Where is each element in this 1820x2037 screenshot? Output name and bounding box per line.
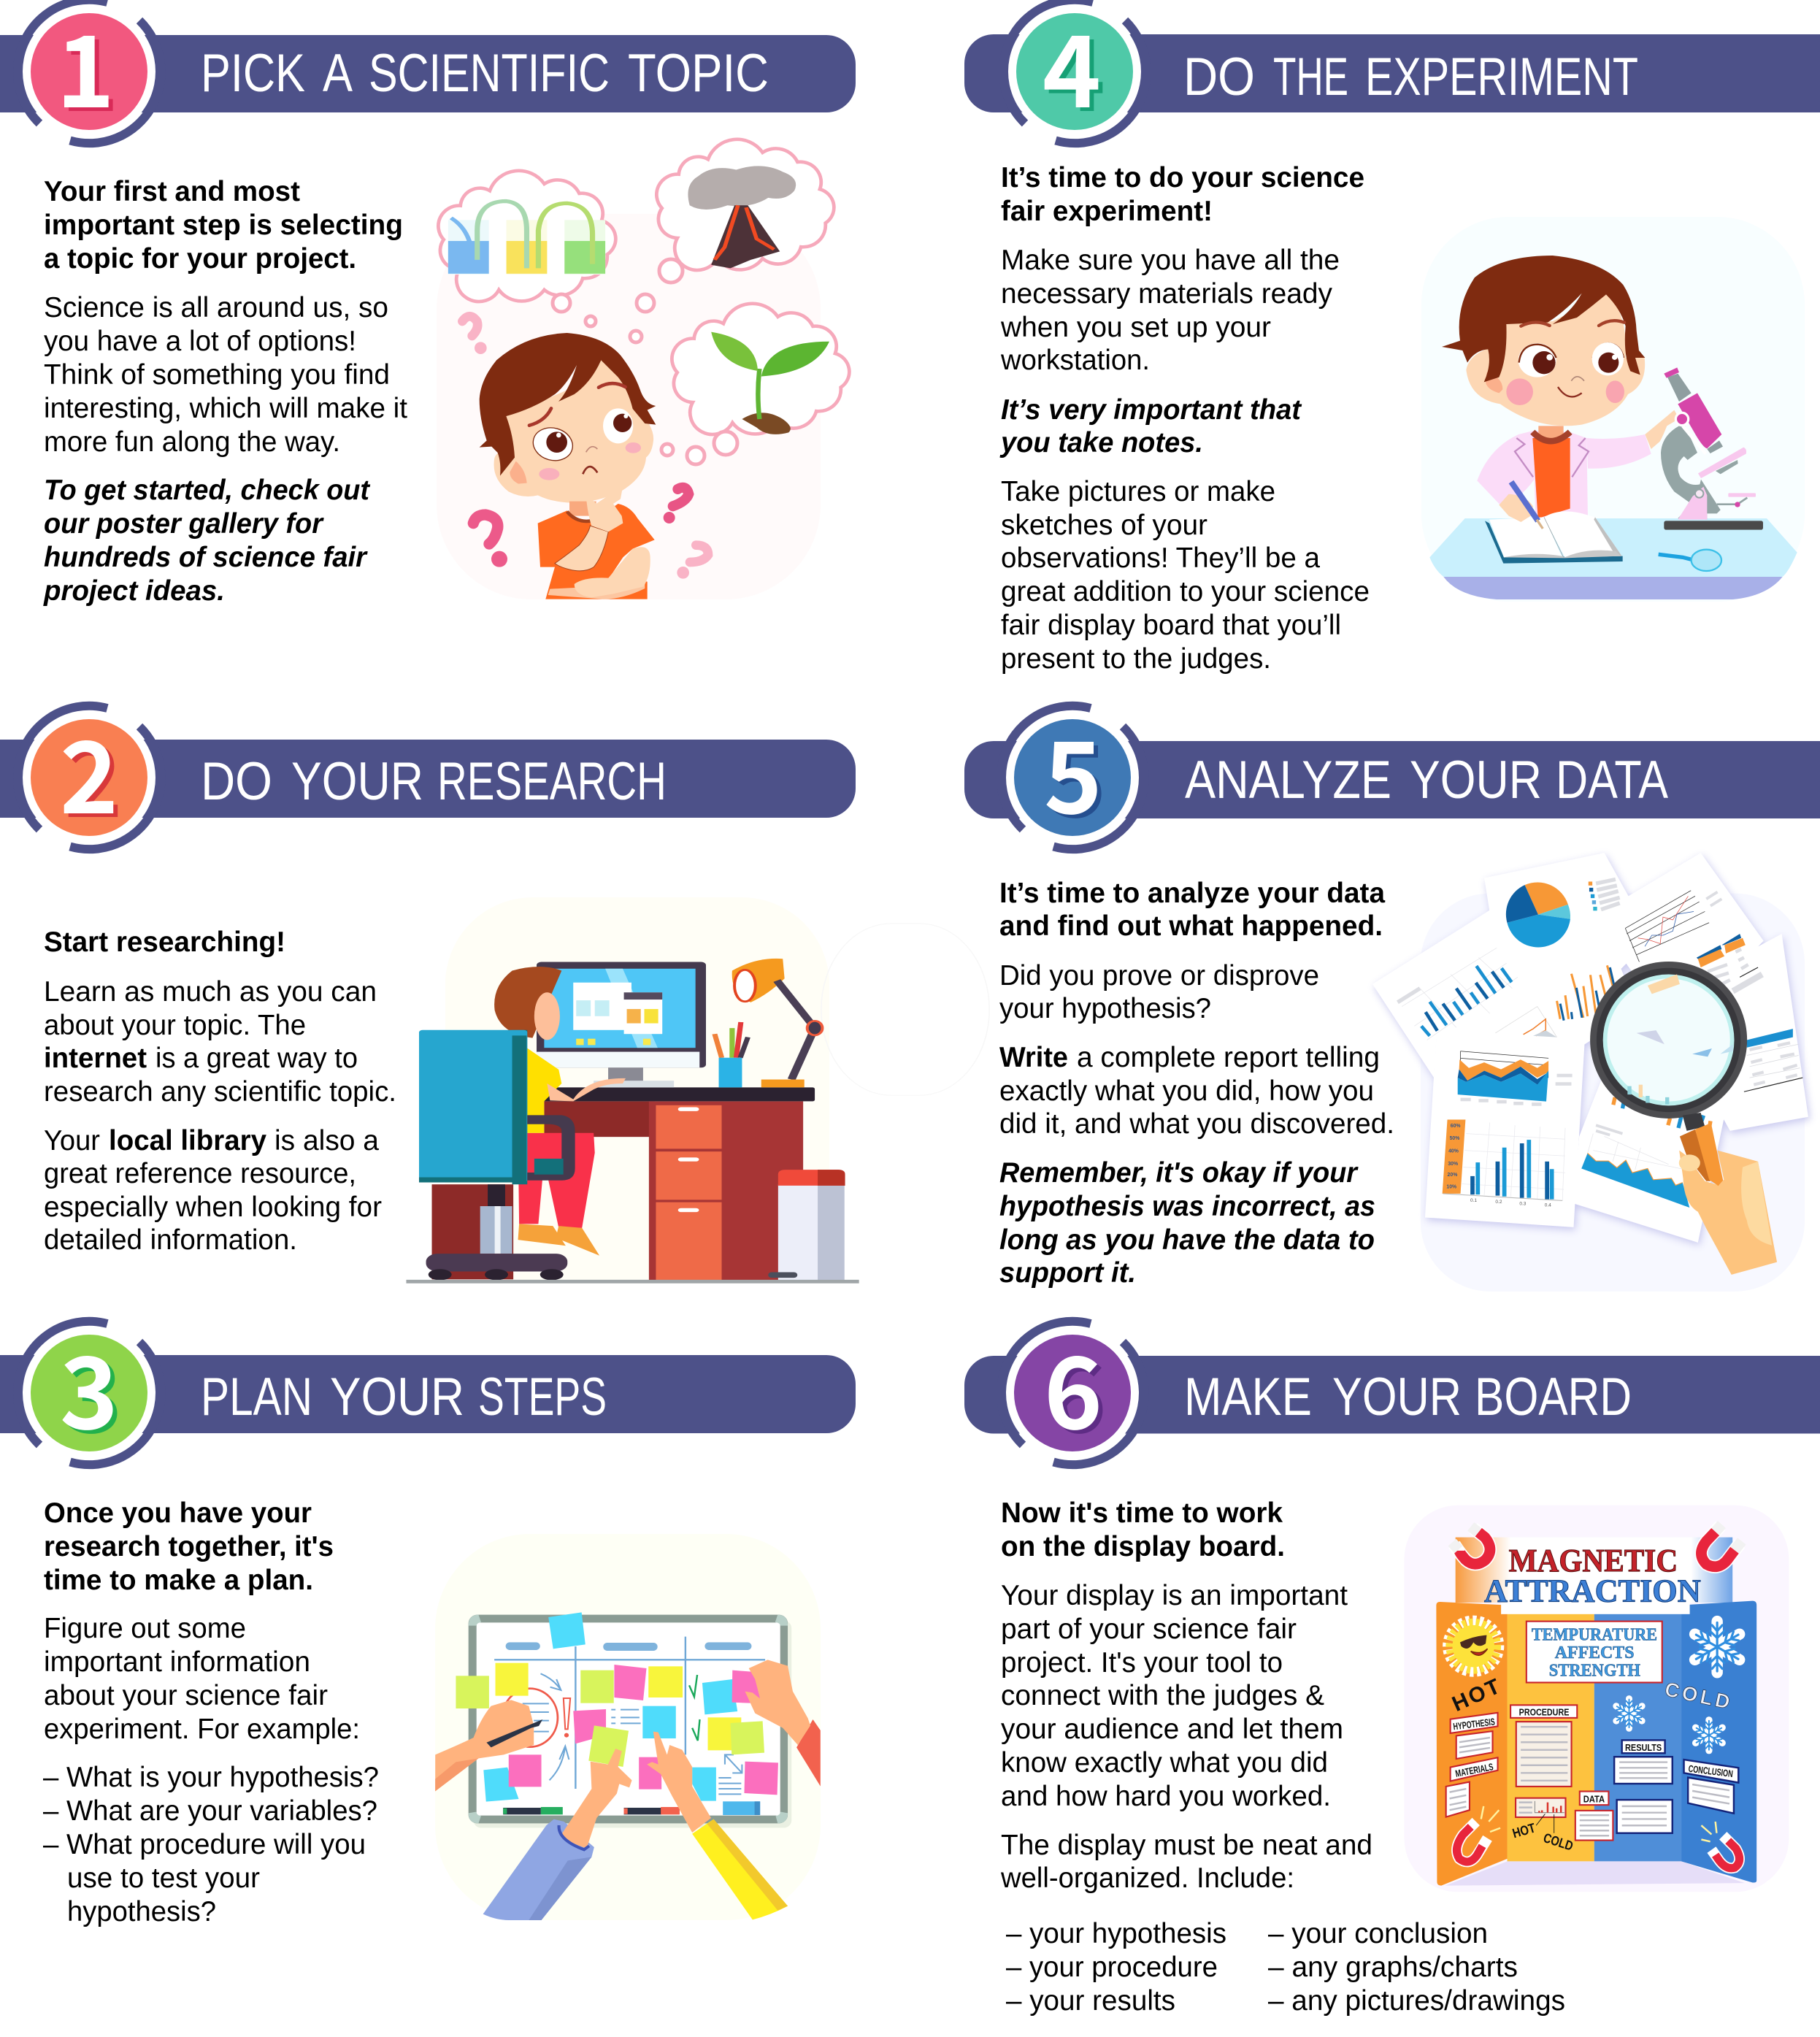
step 2 text block <box>44 927 396 1256</box>
panel: step 2 do your research <box>0 699 989 1284</box>
step 6 text block: Your display is an important <box>1001 1580 1348 1611</box>
step 5 number badge: 5 <box>1044 699 1102 843</box>
step 5 number badge <box>1001 699 1145 849</box>
step 2 text block: local library <box>109 1125 267 1156</box>
step 6 header bar <box>964 1356 1820 1434</box>
step 2 text block: detailed information. <box>44 1224 297 1256</box>
step 5 title: YOUR <box>1410 751 1542 810</box>
board labels: HOT <box>1448 1673 1505 1716</box>
step 2 text block: is also a <box>274 1125 380 1156</box>
step 3 title: YOUR <box>330 1367 464 1427</box>
step 5 text block: a complete report telling <box>1077 1042 1380 1073</box>
step 2 number badge <box>18 699 161 849</box>
step 4 number badge <box>1003 0 1147 143</box>
step 2 number badge: 2 <box>60 699 118 843</box>
panel: step 4 do the experiment <box>964 0 1820 675</box>
step 5 text block: Remember, it's okay if your <box>999 1157 1359 1189</box>
step 5 text block: Write <box>999 1042 1068 1073</box>
step 5 text block <box>999 878 1394 1289</box>
step 4 title: DO <box>1183 47 1255 107</box>
step 6 text block: your audience and let them <box>1001 1714 1343 1745</box>
illustration: charts on papers with magnifying glass: 40% <box>1448 1149 1459 1154</box>
panel: step 3 plan your steps <box>0 1314 856 1927</box>
step 5 text block: your hypothesis? <box>999 993 1211 1024</box>
step 3 text block: – What are your variables? <box>43 1795 377 1827</box>
step 4 text block: fair display board that you’ll <box>1001 610 1341 641</box>
step 2 text block: Learn as much as you can <box>44 976 377 1008</box>
checklist right column: – any graphs/charts <box>1268 1952 1518 1983</box>
board labels: DATA <box>1583 1794 1605 1805</box>
step 1 title: SCIENTIFIC <box>369 44 610 103</box>
checklist left column: – your results <box>1006 1985 1175 2017</box>
step 6 text block: well-organized. Include: <box>1000 1863 1294 1894</box>
step 2 text block: research any scientific topic. <box>44 1076 396 1108</box>
step 3 text block: – What is your hypothesis? <box>43 1762 379 1793</box>
step 1 text block: Your first and most <box>44 176 300 207</box>
step 4 text block: Take pictures or make <box>1001 476 1275 507</box>
step 5 text block: It’s time to analyze your data <box>999 878 1386 909</box>
step 4 title: EXPERIMENT <box>1365 47 1638 107</box>
step 6 text block: Now it's time to work <box>1001 1497 1283 1529</box>
board subtitle: TEMPURATURE <box>1532 1626 1657 1645</box>
illustration: boy with microscope and notebook <box>1421 217 1805 602</box>
snowflakes <box>1615 1622 1742 1751</box>
step 1 text block: a topic for your project. <box>44 243 356 275</box>
illustration: charts on papers with magnifying glass: 0.3 <box>1519 1202 1527 1207</box>
step 3 text block: Once you have your <box>44 1497 312 1529</box>
checklist right column: – any pictures/drawings <box>1268 1985 1565 2017</box>
step 5 title: ANALYZE <box>1185 751 1391 810</box>
step 6 text block: project. It's your tool to <box>1001 1647 1283 1679</box>
board headline: MAGNETIC <box>1509 1542 1678 1578</box>
step 2 text block: internet <box>44 1043 147 1074</box>
step 2 title: YOUR <box>291 752 423 811</box>
step 4 text block: you take notes. <box>999 427 1203 459</box>
step 1 text block: Think of something you find <box>44 359 390 391</box>
step 5 header bar <box>964 741 1820 818</box>
illustration: child at desk with computer <box>406 897 989 1284</box>
step 6 text block: The display must be neat and <box>1001 1830 1372 1861</box>
step 6 text block: connect with the judges & <box>1001 1680 1324 1711</box>
step 1 text block: project ideas. <box>43 575 225 607</box>
illustration: planning whiteboard with sticky notes and hands <box>435 1534 821 1920</box>
step 3 number badge <box>18 1314 161 1465</box>
step 5 text block: did it, and what you discovered. <box>999 1108 1394 1140</box>
board labels: MATERIALS <box>1454 1761 1494 1779</box>
board labels: COLD <box>1663 1678 1735 1714</box>
step 4 text block <box>999 162 1370 675</box>
step 2 text block: Your <box>44 1125 100 1156</box>
step 2 header bar <box>0 740 856 818</box>
illustration: charts on papers with magnifying glass: 0.2 <box>1495 1200 1502 1205</box>
step 4 title: THE <box>1273 47 1348 107</box>
illustration: charts on papers with magnifying glass: 60% <box>1451 1124 1461 1129</box>
board subtitle: STRENGTH <box>1549 1661 1640 1680</box>
board headline: ATTRACTION <box>1484 1572 1701 1608</box>
step 3 text block: research together, it's <box>44 1531 334 1562</box>
magnets <box>1452 1524 1742 1868</box>
step 4 text block: It’s very important that <box>1001 394 1302 426</box>
step 3 text block: about your science fair <box>44 1680 328 1711</box>
step 2 text block: Start researching! <box>44 927 285 958</box>
step 1 title: A <box>323 44 353 103</box>
board labels: HOT <box>1510 1820 1537 1841</box>
illustration: charts on papers with magnifying glass: 10% <box>1446 1185 1456 1190</box>
step 4 text block: workstation. <box>1000 345 1150 376</box>
illustration: thinking boy with thought clouds <box>437 139 849 599</box>
step 1 text block: you have a lot of options! <box>44 326 356 357</box>
step 3 text block: hypothesis? <box>67 1896 216 1927</box>
step 5 text block: Did you prove or disprove <box>999 960 1319 991</box>
step 1 title: PICK <box>201 44 305 103</box>
board labels: COLD <box>1542 1830 1575 1854</box>
step 3 title: PLAN <box>201 1367 312 1427</box>
step 5 text block: exactly what you did, how you <box>999 1075 1374 1107</box>
panel: step 5 analyze your data <box>964 699 1820 1292</box>
step 6 text block <box>1000 1497 1372 1894</box>
step 4 text block: fair experiment! <box>1001 196 1213 227</box>
checklist left column: – your hypothesis <box>1006 1918 1226 1949</box>
step 1 header bar <box>0 35 856 112</box>
step 6 text block: part of your science fair <box>1001 1614 1297 1645</box>
illustration: science fair display board <box>1405 1505 1789 1892</box>
step 4 text block: necessary materials ready <box>1001 278 1333 310</box>
step 6 title: MAKE <box>1184 1367 1312 1427</box>
sun <box>1448 1621 1499 1672</box>
step 2 title: DO <box>201 752 272 811</box>
step 3 title: STEPS <box>478 1367 607 1427</box>
board subtitle: AFFECTS <box>1555 1643 1634 1662</box>
board labels: RESULTS <box>1625 1742 1662 1753</box>
step 3 header bar <box>0 1355 856 1433</box>
illustration: charts on papers with magnifying glass: 0.4 <box>1545 1203 1551 1208</box>
step 5 text block: long as you have the data to <box>999 1224 1375 1256</box>
step 5 text block: support it. <box>999 1257 1136 1289</box>
step 1 text block: our poster gallery for <box>44 508 324 540</box>
step 3 text block <box>43 1497 379 1927</box>
step 2 text block: is a great way to <box>155 1043 358 1074</box>
step 5 title: DATA <box>1556 751 1668 810</box>
step 6 number badge <box>1001 1314 1145 1465</box>
step 3 number badge: 3 <box>60 1314 118 1458</box>
step 4 text block: sketches of your <box>1001 510 1207 541</box>
step 1 text block: To get started, check out <box>44 475 371 506</box>
checklist right column: – your conclusion <box>1268 1918 1488 1949</box>
step 5 text block: hypothesis was incorrect, as <box>999 1191 1375 1222</box>
step 4 text block: It’s time to do your science <box>1001 162 1364 193</box>
step 6 title: BOARD <box>1475 1367 1632 1427</box>
board labels: PROCEDURE <box>1519 1706 1570 1717</box>
panel: step 1 pick a scientific topic <box>0 0 856 607</box>
step 2 text block: especially when looking for <box>44 1192 382 1223</box>
step 3 text block: important information <box>44 1646 310 1678</box>
step 4 text block: observations! They’ll be a <box>1001 542 1321 574</box>
board labels: HYPOTHESIS <box>1453 1716 1496 1732</box>
step 3 text block: use to test your <box>67 1863 260 1894</box>
panel: step 6 make your board <box>964 1314 1820 2017</box>
step 1 text block: interesting, which will make it <box>44 393 407 424</box>
step 6 text block: on the display board. <box>1001 1531 1285 1562</box>
step 2 text block: great reference resource, <box>44 1158 356 1189</box>
illustration: charts on papers with magnifying glass: 30% <box>1448 1162 1458 1167</box>
board labels <box>1448 1673 1735 1854</box>
illustration: charts on papers with magnifying glass: 0.1 <box>1470 1198 1477 1203</box>
illustration: charts on papers with magnifying glass <box>1372 853 1808 1292</box>
step 2 text block: about your topic. The <box>44 1010 306 1041</box>
checklist left column: – your procedure <box>1006 1952 1218 1983</box>
board labels: CONCLUSION <box>1688 1763 1734 1779</box>
checklist right column <box>1268 1918 1565 2017</box>
step 6 text block: and how hard you worked. <box>1001 1781 1331 1812</box>
boy figure <box>462 316 708 599</box>
step 3 text block: Figure out some <box>44 1613 246 1644</box>
step 3 text block: – What procedure will you <box>43 1829 366 1860</box>
step 4 header bar <box>964 34 1820 112</box>
step 1 title: TOPIC <box>628 44 769 103</box>
step 1 number badge <box>18 0 161 143</box>
step 4 text block: great addition to your science <box>1001 576 1370 607</box>
step 1 text block: important step is selecting <box>44 210 403 241</box>
step 3 text block: experiment. For example: <box>44 1714 360 1745</box>
step 1 text block: more fun along the way. <box>44 426 340 458</box>
illustration: charts on papers with magnifying glass: 50% <box>1450 1136 1459 1141</box>
step 4 text block: Make sure you have all the <box>1001 245 1340 276</box>
step 4 text block: when you set up your <box>1000 312 1271 343</box>
step 6 number badge: 6 <box>1044 1314 1102 1458</box>
illustration: charts on papers with magnifying glass: 20% <box>1448 1173 1457 1178</box>
checklist left column <box>1006 1918 1226 2017</box>
step 1 text block <box>43 176 407 607</box>
step 2 title: RESEARCH <box>437 752 667 811</box>
step 6 text block: know exactly what you did <box>1001 1747 1328 1779</box>
step 5 text block: and find out what happened. <box>999 910 1383 942</box>
board subtitle <box>1532 1626 1657 1680</box>
board headline <box>1484 1542 1701 1608</box>
step 1 text block: Science is all around us, so <box>44 292 388 323</box>
step 3 text block: time to make a plan. <box>44 1565 313 1596</box>
step 6 title: YOUR <box>1332 1367 1462 1427</box>
step 4 text block: present to the judges. <box>1001 643 1271 675</box>
step 1 text block: hundreds of science fair <box>44 542 368 573</box>
